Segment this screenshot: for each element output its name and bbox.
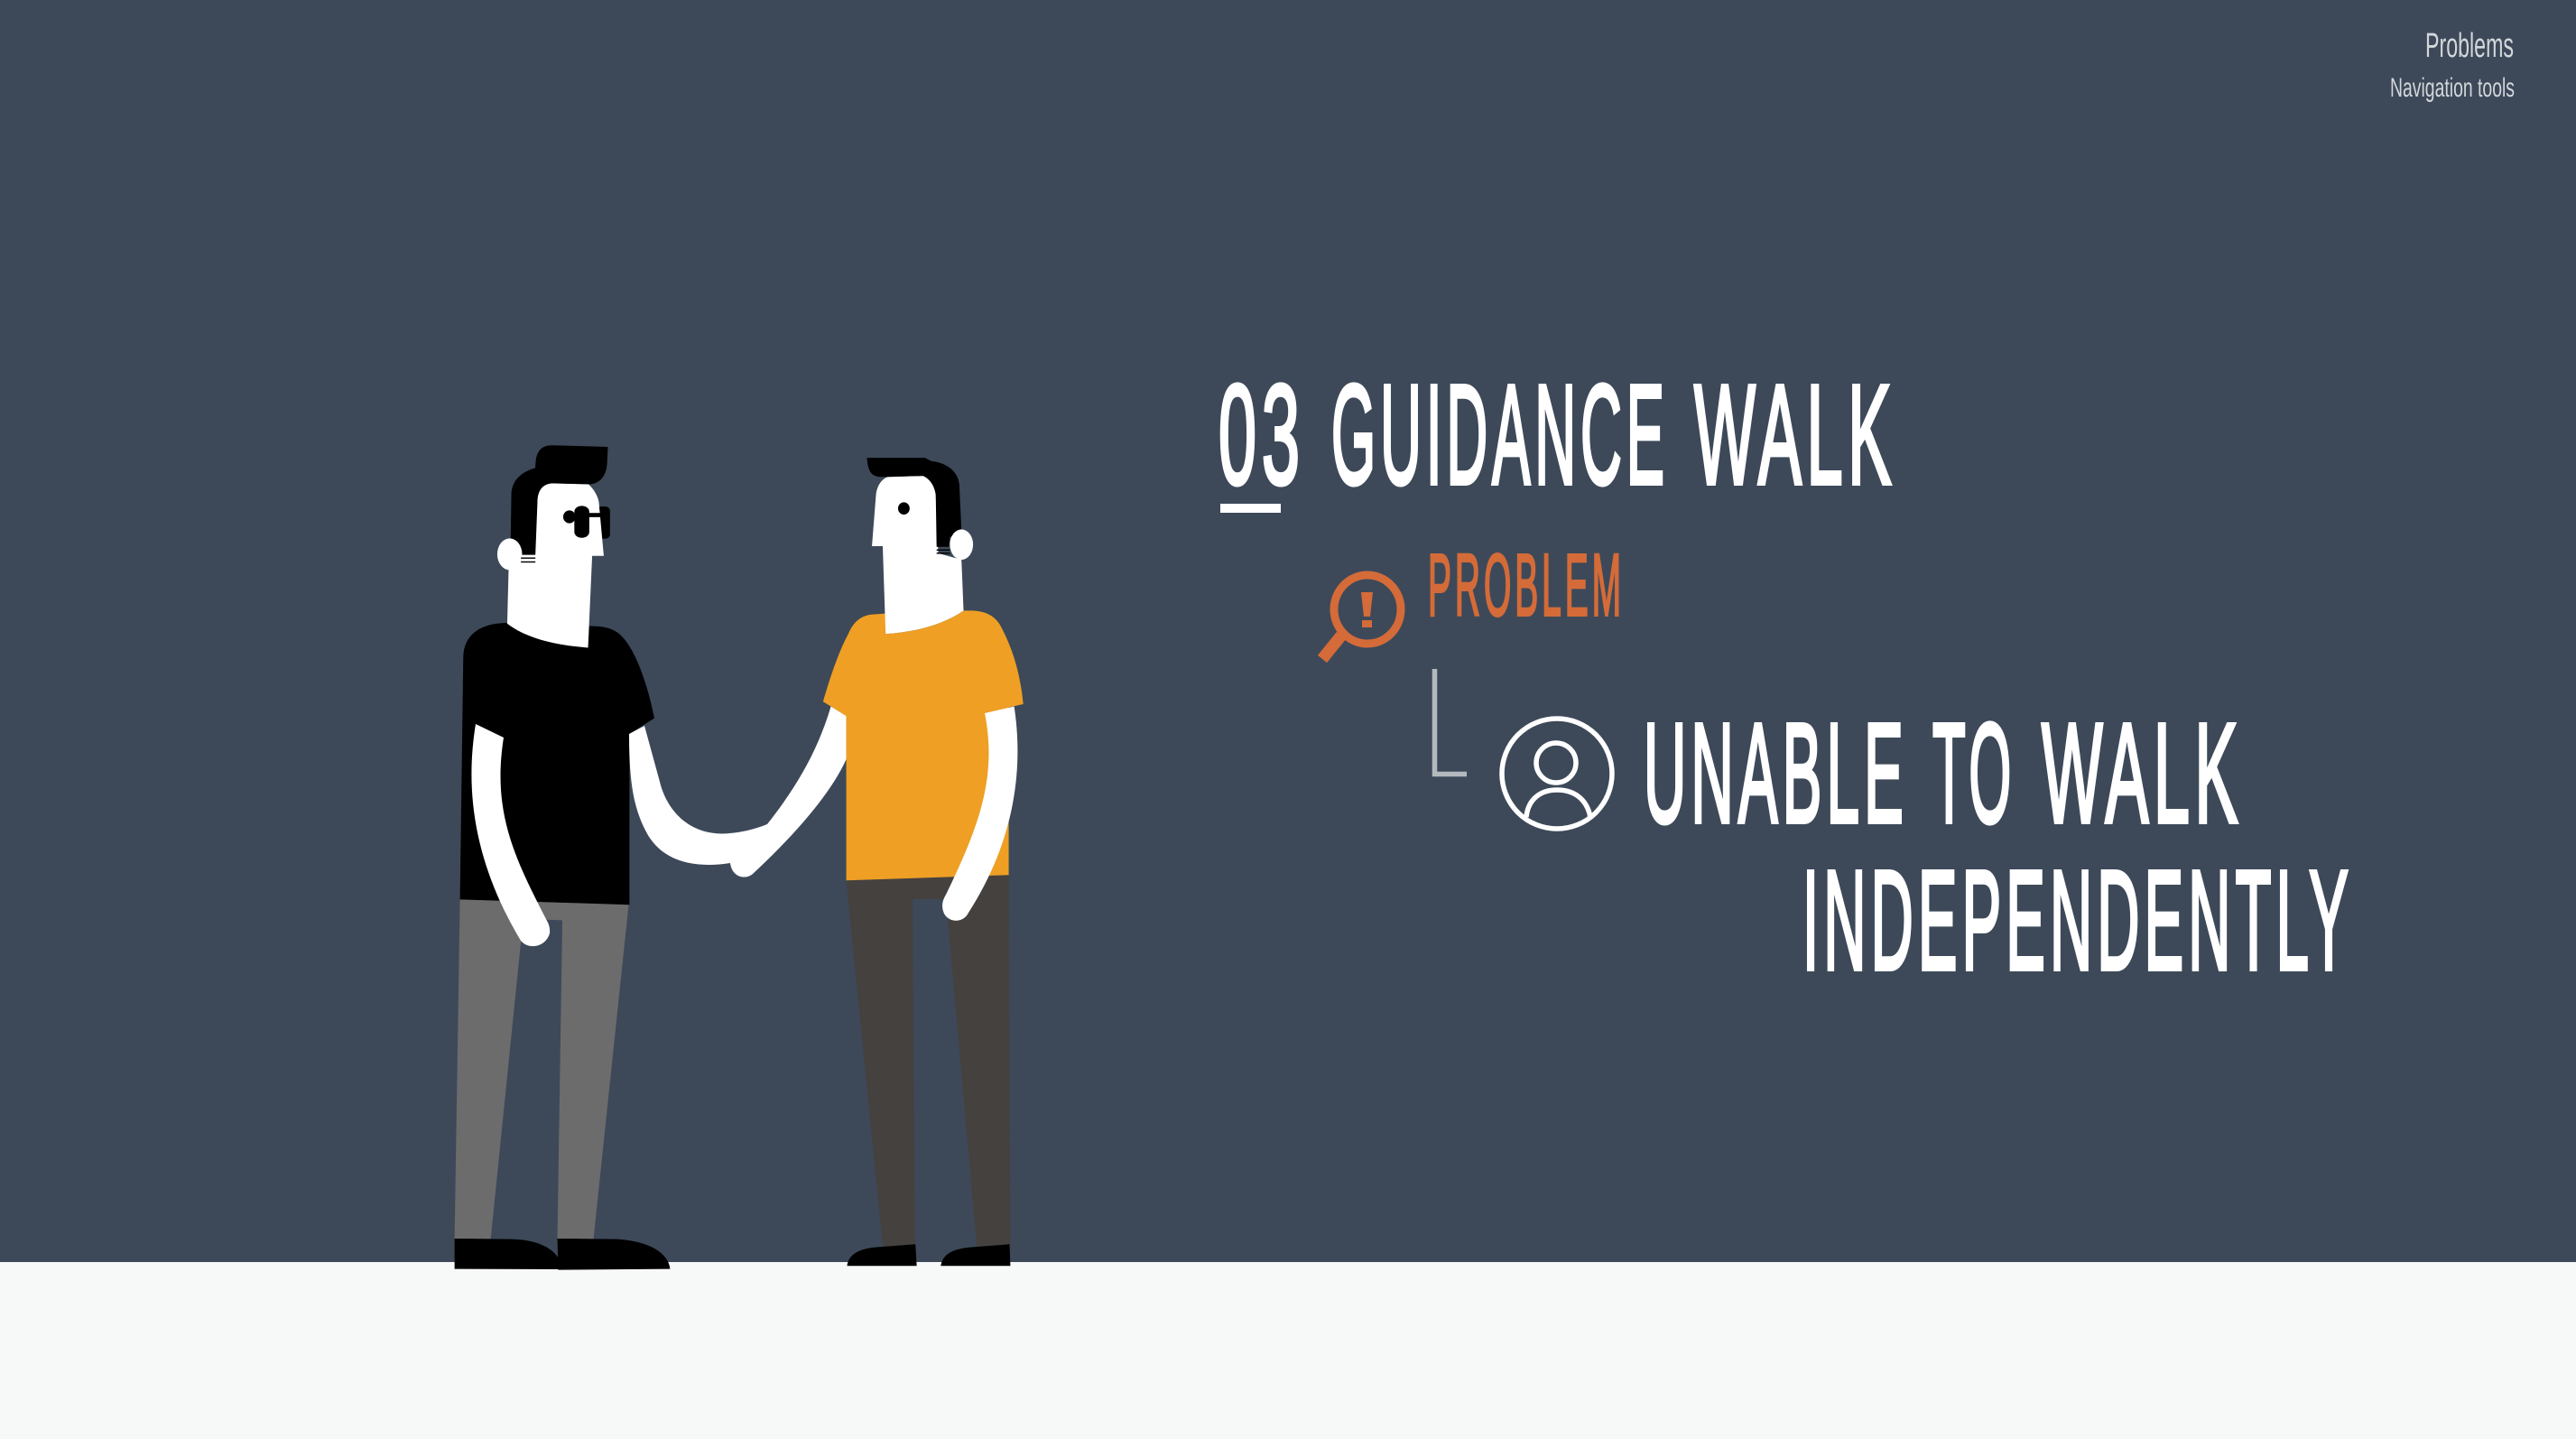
hanging arm bbox=[471, 724, 550, 946]
icon: magnifier with exclamation bbox=[1322, 575, 1401, 659]
title underline bbox=[1220, 504, 1281, 513]
problem statement: WALK bbox=[2042, 695, 2243, 852]
section title: 03 bbox=[1219, 356, 1305, 515]
problem statement: TO bbox=[1932, 695, 2015, 852]
figure: man in orange shirt bbox=[823, 458, 1024, 1266]
slide canvas: PROBLEM bbox=[1428, 536, 1625, 634]
connector line bbox=[1435, 669, 1467, 775]
handshake arms bbox=[629, 706, 847, 877]
orange shirt bbox=[823, 610, 1024, 880]
ground band bbox=[0, 1262, 2576, 1439]
section title: GUIDANCE bbox=[1331, 356, 1669, 515]
figure: man in black shirt bbox=[455, 445, 670, 1270]
navigation breadcrumb: Problems bbox=[2425, 27, 2514, 65]
slide canvas: WALK bbox=[1694, 356, 1896, 515]
navigation breadcrumb bbox=[2390, 27, 2515, 103]
hanging arm bbox=[942, 706, 1017, 921]
dark trousers and shoes bbox=[847, 875, 1010, 1266]
grey trousers and shoes bbox=[455, 899, 670, 1270]
icon: person in circle bbox=[1502, 719, 1612, 829]
problem statement bbox=[1644, 695, 2353, 1000]
problem statement: UNABLE bbox=[1644, 695, 1908, 852]
head bbox=[867, 458, 973, 634]
section title bbox=[1219, 356, 1896, 515]
head with glasses bbox=[497, 445, 610, 647]
black shirt bbox=[460, 623, 654, 905]
